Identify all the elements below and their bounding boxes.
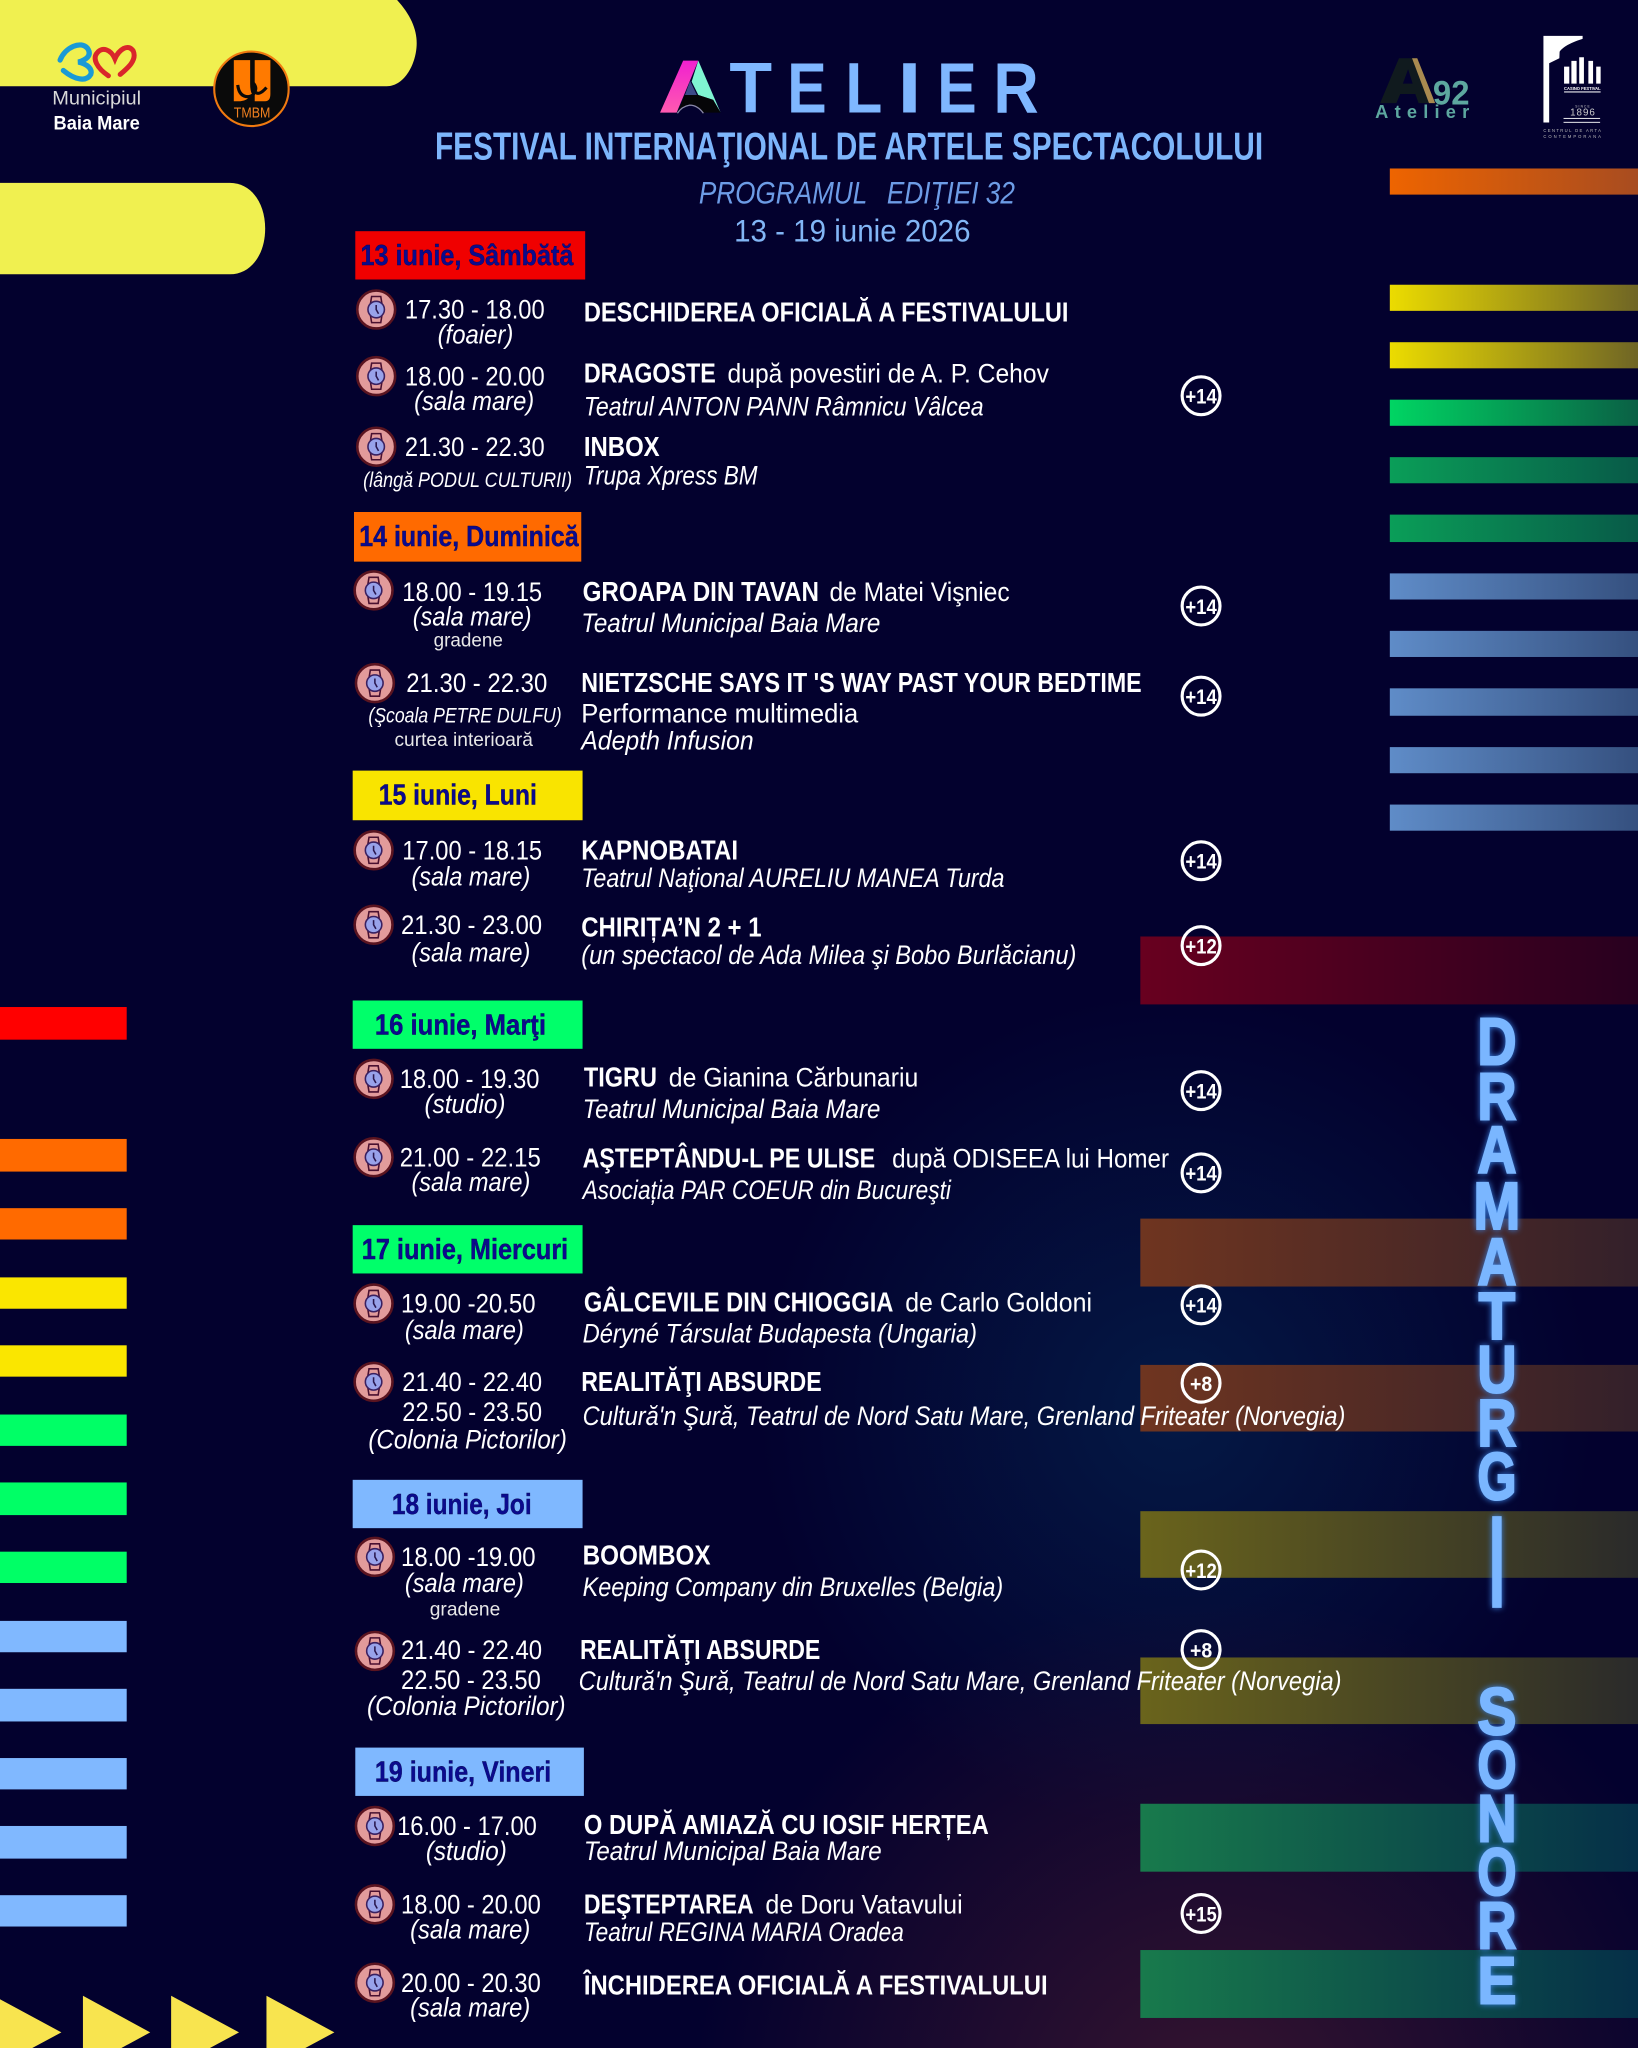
vertical neon title: DRAMATURGI SONORE: G <box>1477 1440 1517 1514</box>
event: Boombox <box>356 1538 1003 1621</box>
vertical neon title: DRAMATURGI SONORE: A <box>1477 1114 1517 1188</box>
right small gradient bars <box>1390 168 1638 831</box>
event: Nietzsche: NIETZSCHE SAYS IT 'S WAY PAST YOUR BEDTIME <box>581 667 1142 698</box>
event: Kapnobatai: KAPNOBATAI <box>581 834 738 865</box>
event: Inbox: 21.30 - 22.30 <box>405 432 545 462</box>
age rating badges: +8 <box>1190 1639 1212 1662</box>
event: Deschiderea: (foaier) <box>438 320 513 350</box>
event: Inbox: Trupa Xpress BM <box>584 461 758 491</box>
event: O după amiază cu Iosif Herțea: O DUPĂ AMIAZĂ CU IOSIF HERȚEA <box>584 1809 989 1840</box>
event: Dragoste <box>357 357 1049 421</box>
event: Nietzsche: Performance multimedia <box>581 698 858 728</box>
logo: Centrul de Artă Contemporană: CONTEMPORANA <box>1543 134 1601 139</box>
title: ATELIER: R <box>993 49 1039 128</box>
event: Închiderea: 20.00 - 20.30 <box>401 1968 541 1998</box>
event: Nietzsche <box>356 664 1142 756</box>
heading: festival name: FESTIVAL INTERNAŢIONAL DE ARTELE SPECTACOLULUI <box>435 125 1263 168</box>
age rating badges: +14 <box>1185 386 1217 409</box>
event: Inbox: (lângă PODUL CULTURII) <box>363 467 572 492</box>
logo: A92 Atelier: 92 <box>1433 74 1469 112</box>
event: Groapa din tavan: de Matei Vişniec <box>829 577 1010 607</box>
event: Deschiderea <box>357 291 1068 350</box>
event: Realități absurde <box>355 1363 1345 1454</box>
decorative yellow pill second <box>0 183 265 274</box>
day header: 17 iunie, Miercuri <box>362 1234 568 1266</box>
event: Realități absurde: 22.50 - 23.50 <box>402 1397 542 1427</box>
event: Realități absurde: Cultură'n Şură, Teatrul de Nord Satu Mare, Grenland Friteater (Norvegia) <box>583 1401 1345 1431</box>
event: Boombox: (sala mare) <box>405 1568 524 1598</box>
heading: program edition: PROGRAMUL <box>699 176 867 211</box>
event: Nietzsche: (Şcoala PETRE DULFU) <box>368 702 562 727</box>
day header <box>353 1000 583 1049</box>
logo: Municipiul Baia Mare <box>52 45 141 134</box>
event: O după amiază cu Iosif Herțea <box>356 1807 989 1866</box>
logo: TMBM: TMBM <box>234 105 270 122</box>
event: Gâlcevile din Chioggia: (sala mare) <box>405 1315 524 1345</box>
event: Gâlcevile din Chioggia: Déryné Társulat Budapesta (Ungaria) <box>583 1319 977 1349</box>
logo: Municipiul Baia Mare: Municipiul <box>52 87 141 109</box>
event: O după amiază cu Iosif Herțea: 16.00 - 17.00 <box>397 1811 537 1841</box>
event: O după amiază cu Iosif Herțea: (studio) <box>426 1836 507 1866</box>
event: Nietzsche: Adepth Infusion <box>579 726 754 756</box>
heading: program edition <box>699 176 1015 211</box>
event: Tigru: de Gianina Cărbunariu <box>669 1063 918 1093</box>
event: Realități absurde: 21.40 - 22.40 <box>401 1635 542 1665</box>
event: Groapa din tavan <box>355 571 1010 652</box>
day header <box>355 1748 584 1796</box>
age rating badges: +14 <box>1185 686 1217 709</box>
event: Chirița'n 2+1 <box>355 906 1076 970</box>
event: Închiderea: ÎNCHIDEREA OFICIALĂ A FESTIVALULUI <box>582 1969 1048 2000</box>
age rating badges: +15 <box>1185 1903 1217 1926</box>
event: Tigru: Teatrul Municipal Baia Mare <box>583 1094 880 1124</box>
vertical neon title: DRAMATURGI SONORE: R <box>1477 1060 1517 1134</box>
panel: 13 iunie <box>355 231 1068 492</box>
title: ATELIER: E <box>787 49 827 128</box>
vertical neon title: DRAMATURGI SONORE: U <box>1477 1333 1517 1407</box>
panel: 17 iunie <box>353 1225 1345 1454</box>
event: Deșteptarea: (sala mare) <box>410 1914 530 1944</box>
event: Gâlcevile din Chioggia: 19.00 -20.50 <box>401 1289 536 1319</box>
vertical neon title: DRAMATURGI SONORE: S <box>1477 1676 1517 1750</box>
event: Realități absurde <box>356 1632 1341 1721</box>
event: Realități absurde: 21.40 - 22.40 <box>402 1367 542 1397</box>
day header: 19 iunie, Vineri <box>375 1757 551 1789</box>
event: Groapa din tavan: (sala mare) <box>413 602 532 632</box>
event: Nietzsche: curtea interioară <box>394 729 533 751</box>
vertical neon title: DRAMATURGI SONORE: D <box>1477 1005 1517 1079</box>
event: Deșteptarea: Teatrul REGINA MARIA Oradea <box>584 1917 904 1947</box>
day header <box>353 1225 583 1273</box>
day header: 15 iunie, Luni <box>379 780 537 812</box>
logo: Centrul de Artă Contemporană: CENTRUL DE ARTA <box>1543 128 1601 133</box>
logo: Centrul de Artă Contemporană: SINCE <box>1575 105 1590 109</box>
event: Realități absurde: Cultură'n Şură, Teatrul de Nord Satu Mare, Grenland Friteater (Norvegia) <box>579 1666 1341 1696</box>
vertical neon title: DRAMATURGI SONORE: O <box>1477 1729 1517 1803</box>
event: Tigru: TIGRU <box>584 1062 657 1093</box>
event: Groapa din tavan: 18.00 - 19.15 <box>402 577 542 607</box>
heading: program edition: EDIŢIEI 32 <box>887 176 1015 211</box>
event: Realități absurde: (Colonia Pictorilor) <box>367 1691 566 1721</box>
vertical neon title: DRAMATURGI SONORE: T <box>1479 1280 1515 1354</box>
event: Închiderea: (sala mare) <box>410 1993 530 2023</box>
event: Tigru <box>355 1060 918 1124</box>
panel: 15 iunie <box>353 771 1076 970</box>
event: Dragoste: DRAGOSTE <box>584 358 716 389</box>
vertical neon title: DRAMATURGI SONORE: N <box>1477 1783 1517 1857</box>
event: Boombox: Keeping Company din Bruxelles (Belgia) <box>583 1572 1003 1602</box>
event: Realități absurde: REALITĂŢI ABSURDE <box>580 1634 820 1665</box>
day header: 16 iunie, Marţi <box>375 1009 546 1041</box>
age rating badges: +14 <box>1185 1080 1217 1103</box>
event: Groapa din tavan: GROAPA DIN TAVAN <box>583 576 819 607</box>
event: Tigru: (studio) <box>425 1089 506 1119</box>
event: Dragoste: după povestiri de A. P. Cehov <box>728 359 1049 389</box>
event: Dragoste: Teatrul ANTON PANN Râmnicu Vâlcea <box>584 391 984 421</box>
event: Așteptându-l pe Ulise: după ODISEEA lui Homer <box>892 1144 1169 1174</box>
event: Așteptându-l pe Ulise: AŞTEPTÂNDU-L PE ULISE <box>583 1143 875 1174</box>
age rating badges: +12 <box>1185 935 1217 958</box>
event: Chirița'n 2+1: 21.30 - 23.00 <box>401 910 542 940</box>
left colour bars <box>0 1007 127 1927</box>
event: Deschiderea: DESCHIDEREA OFICIALĂ A FESTIVALULUI <box>584 296 1068 327</box>
event: Tigru: 18.00 - 19.30 <box>400 1064 539 1094</box>
logo: A92 Atelier: Atelier <box>1375 101 1469 122</box>
event: Kapnobatai: Teatrul Naţional AURELIU MANEA Turda <box>581 863 1004 893</box>
vertical neon title: DRAMATURGI SONORE: M <box>1473 1170 1520 1244</box>
decorative yellow pill top <box>0 0 417 86</box>
event: Așteptându-l pe Ulise: 21.00 - 22.15 <box>400 1142 541 1172</box>
logo: Centrul de Artă Contemporană: CASINO FESTIVAL <box>1564 86 1601 91</box>
event: Gâlcevile din Chioggia <box>355 1285 1092 1349</box>
title: ATELIER: I <box>897 49 922 128</box>
event: Nietzsche: 21.30 - 22.30 <box>406 668 547 698</box>
yellow arrow triangles <box>0 1996 334 2048</box>
day header: 14 iunie, Duminică <box>359 521 580 553</box>
day header: 13 iunie, Sâmbătă <box>361 240 574 272</box>
panel: 18 iunie <box>353 1480 1341 1721</box>
age rating badges <box>1182 377 1220 1932</box>
event: Așteptându-l pe Ulise: (sala mare) <box>411 1167 530 1197</box>
right large gradient bars <box>1140 936 1638 2018</box>
vertical neon title: DRAMATURGI SONORE <box>1473 1005 1520 2019</box>
panel: 16 iunie <box>353 1000 1169 1205</box>
vertical neon title: DRAMATURGI SONORE: R <box>1477 1387 1517 1461</box>
event: Gâlcevile din Chioggia: GÂLCEVILE DIN CHIOGGIA <box>584 1286 894 1317</box>
event: Inbox <box>357 428 758 492</box>
logo: Centrul de Artă Contemporană <box>1543 36 1601 139</box>
event: Realități absurde: (Colonia Pictorilor) <box>368 1424 567 1454</box>
vertical neon title: DRAMATURGI SONORE: I <box>1488 1488 1506 1637</box>
event: Dragoste: (sala mare) <box>414 386 534 416</box>
event: Chirița'n 2+1: (un spectacol de Ada Milea şi Bobo Burlăcianu) <box>581 940 1076 970</box>
event: O după amiază cu Iosif Herțea: Teatrul Municipal Baia Mare <box>584 1836 882 1866</box>
logo: A92 Atelier <box>1375 58 1469 122</box>
event: Kapnobatai: 17.00 - 18.15 <box>402 835 542 865</box>
day header <box>354 512 581 562</box>
logo: Municipiul Baia Mare: Baia Mare <box>54 113 140 134</box>
age rating badges: +12 <box>1185 1560 1217 1583</box>
age rating badges: +14 <box>1185 1163 1217 1186</box>
day header: 18 iunie, Joi <box>392 1489 532 1521</box>
event: Chirița'n 2+1: CHIRIȚA’N 2 + 1 <box>581 911 762 942</box>
event: Gâlcevile din Chioggia: de Carlo Goldoni <box>905 1287 1092 1317</box>
event: Groapa din tavan: gradene <box>434 630 503 652</box>
event: Închiderea <box>356 1964 1048 2023</box>
event: Dragoste: 18.00 - 20.00 <box>405 361 545 391</box>
event: Groapa din tavan: Teatrul Municipal Baia Mare <box>581 608 880 638</box>
event: Boombox: 18.00 -19.00 <box>401 1542 536 1572</box>
event: Boombox: gradene <box>430 1599 500 1621</box>
age rating badges: +14 <box>1185 596 1217 619</box>
logo: TMBM <box>214 52 289 126</box>
event: Kapnobatai <box>355 831 1004 893</box>
event: Deschiderea: 17.30 - 18.00 <box>405 295 545 325</box>
event: Deșteptarea <box>356 1885 963 1947</box>
event: Kapnobatai: (sala mare) <box>411 862 530 892</box>
event: Inbox: INBOX <box>584 431 660 462</box>
title: ATELIER <box>660 49 1039 128</box>
vertical neon title: DRAMATURGI SONORE: O <box>1477 1836 1517 1910</box>
event: Realități absurde: 22.50 - 23.50 <box>401 1665 541 1695</box>
event: Deșteptarea: 18.00 - 20.00 <box>401 1889 541 1919</box>
day header <box>353 1480 583 1528</box>
panel: 14 iunie <box>354 512 1142 756</box>
event: Chirița'n 2+1: (sala mare) <box>411 937 530 967</box>
logo: Centrul de Artă Contemporană: 1896 <box>1570 108 1595 119</box>
title: ATELIER: L <box>845 49 882 128</box>
event: Realități absurde: REALITĂŢI ABSURDE <box>581 1366 822 1397</box>
vertical neon title: DRAMATURGI SONORE: A <box>1477 1226 1517 1300</box>
event: Deșteptarea: DEŞTEPTAREA <box>584 1888 754 1919</box>
vertical neon title: DRAMATURGI SONORE: R <box>1477 1890 1517 1964</box>
panel: 19 iunie <box>355 1748 1048 2023</box>
event: Așteptându-l pe Ulise <box>355 1138 1169 1205</box>
title: ATELIER: T <box>729 49 772 128</box>
icon: A logo <box>660 61 721 113</box>
day header <box>353 771 583 820</box>
age rating badges: +14 <box>1185 851 1217 874</box>
event: Boombox: BOOMBOX <box>583 1540 711 1571</box>
day header <box>355 231 585 280</box>
event: Deșteptarea: de Doru Vatavului <box>765 1889 963 1919</box>
title: ATELIER: E <box>937 49 977 128</box>
age rating badges: +14 <box>1185 1295 1217 1318</box>
vertical neon title: DRAMATURGI SONORE: E <box>1477 1945 1517 2019</box>
heading: dates: 13 - 19 iunie 2026 <box>734 214 971 249</box>
event: Așteptându-l pe Ulise: Asociația PAR COEUR din Bucureşti <box>581 1175 952 1205</box>
age rating badges: +8 <box>1190 1373 1212 1396</box>
